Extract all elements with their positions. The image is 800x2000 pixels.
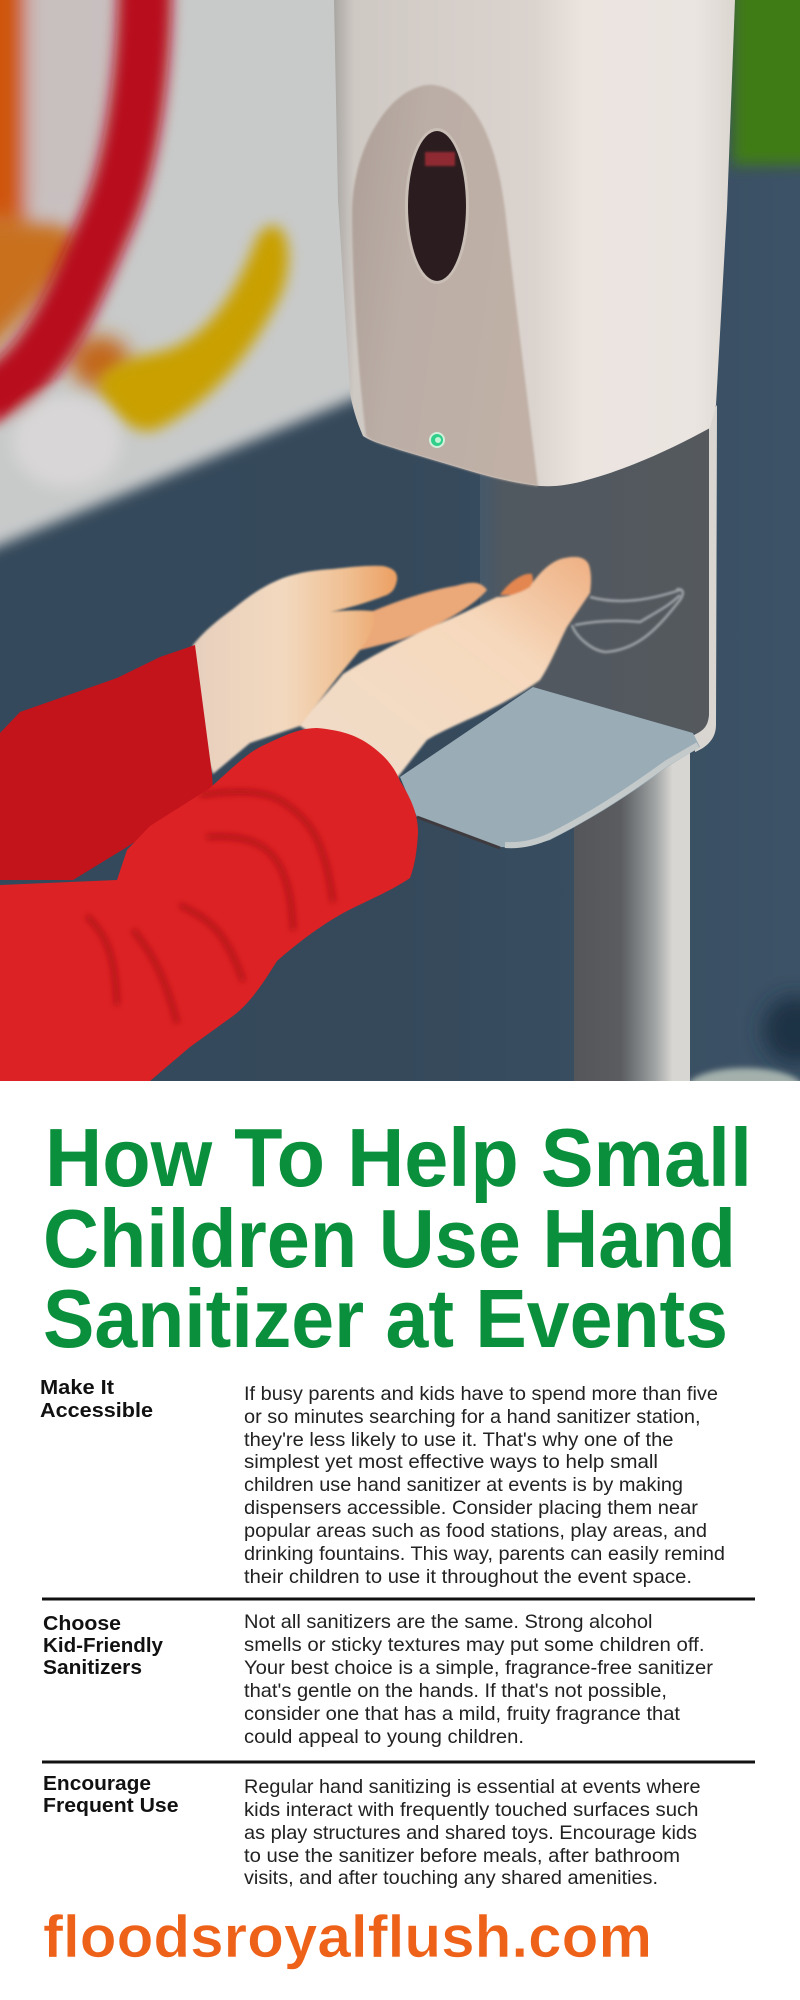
near sleeve [0, 728, 418, 1081]
section 1 heading [40, 1376, 153, 1422]
section 3 text [244, 1776, 700, 1889]
section 1 text [244, 1383, 725, 1588]
section 1 text: they're less likely to use it. That's why one of the [244, 1429, 674, 1451]
dispenser sensor window [405, 128, 469, 284]
dispenser sensor recess [352, 85, 538, 486]
title [43, 1111, 752, 1365]
far fingers behind near hand [500, 574, 533, 595]
section 1 text: drinking fountains. This way, parents can easily remind [244, 1543, 725, 1565]
section 2 heading [43, 1612, 164, 1679]
section 3 text: to use the sanitizer before meals, after bathroom [244, 1845, 680, 1867]
icon: green indicator light [429, 432, 445, 448]
section 3 text: as play structures and shared toys. Encourage kids [244, 1822, 697, 1844]
section 2 heading: Kid-Friendly [43, 1634, 164, 1657]
near hand [300, 557, 591, 778]
section 1 text: their children to use it throughout the event space. [244, 1566, 692, 1588]
section 1 text: or so minutes searching for a hand sanitizer station, [244, 1406, 700, 1428]
section 2 text: Your best choice is a simple, fragrance-free sanitizer [244, 1657, 714, 1679]
drip tray shadow edge [417, 817, 500, 848]
title: How To Help Small [45, 1111, 752, 1204]
section 1 heading: Make It [40, 1376, 114, 1399]
hands [190, 557, 591, 778]
dispenser drip tray [400, 687, 700, 847]
footer website url: floodsroyalflush.com [43, 1904, 652, 1970]
section 1 text: children use hand sanitizer at events is by making [244, 1474, 683, 1496]
section 2 text: Not all sanitizers are the same. Strong alcohol [244, 1611, 652, 1633]
section 3 text: Regular hand sanitizing is essential at events where [244, 1776, 700, 1798]
section 3 text: visits, and after touching any shared amenities. [244, 1867, 658, 1889]
far hand palm [190, 566, 397, 774]
section 2 heading: Choose [43, 1612, 121, 1635]
section 1 text: If busy parents and kids have to spend more than five [244, 1383, 718, 1405]
section 1 text: dispensers accessible. Consider placing them near [244, 1497, 699, 1519]
sleeve fold shadows [87, 792, 333, 1023]
section 2 heading: Sanitizers [43, 1656, 142, 1679]
section 2 text [244, 1611, 714, 1748]
section 3 text: kids interact with frequently touched surfaces such [244, 1799, 698, 1821]
section 2 text: smells or sticky textures may put some children off. [244, 1634, 704, 1656]
title: Sanitizer at Events [43, 1272, 728, 1365]
section 1 heading: Accessible [40, 1399, 153, 1422]
hand outline engraved on the panel [572, 589, 683, 652]
section 2 text: could appeal to young children. [244, 1726, 524, 1748]
panel edge highlight [694, 405, 717, 752]
section 3 heading: Frequent Use [43, 1794, 178, 1817]
photo background [0, 0, 800, 1108]
dispenser body [334, 0, 735, 486]
section 3 heading: Encourage [43, 1772, 151, 1795]
icon: dispenser stand pole [574, 740, 690, 1081]
section 1 text: simplest yet most effective ways to help small [244, 1451, 658, 1473]
section 3 heading [43, 1772, 178, 1817]
section 2 text: consider one that has a mild, fruity fragrance that [244, 1703, 681, 1725]
photo: child's hands under a sanitizer dispenser [0, 0, 800, 1108]
drip tray light edge [505, 745, 698, 845]
far hand fingers [360, 583, 487, 650]
section 2 text: that's gentle on the hands. If that's not possible, [244, 1680, 667, 1702]
title: Children Use Hand [43, 1192, 736, 1285]
sensor glass [408, 131, 466, 281]
section 1 text: popular areas such as food stations, play areas, and [244, 1520, 707, 1542]
far sleeve [0, 645, 213, 880]
dispenser back panel [480, 420, 710, 735]
